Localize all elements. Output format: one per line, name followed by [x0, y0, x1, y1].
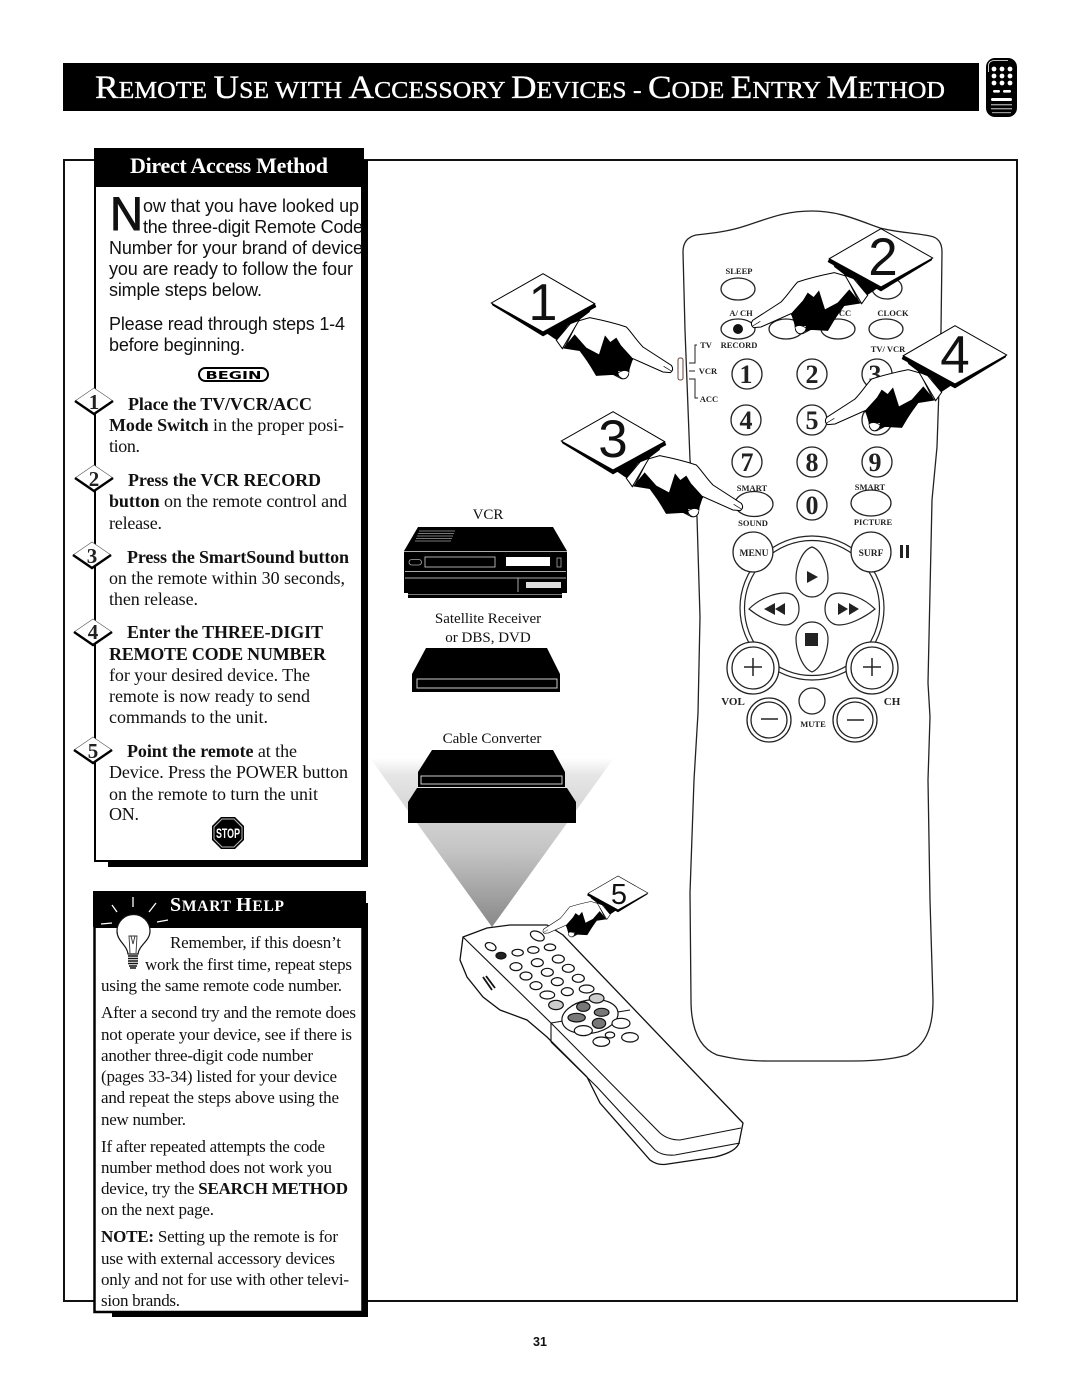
volume and channel buttons: CH	[884, 696, 901, 708]
intro text: Please read through steps 1-4	[109, 314, 345, 334]
help text: If after repeated attempts the code	[101, 1137, 325, 1156]
mode switch	[678, 340, 718, 404]
number keypad: 1	[740, 360, 752, 389]
step card 2 with pointing hand: 2	[868, 228, 898, 287]
step card 1 with pointing hand: 1	[529, 274, 557, 332]
step 2: release.	[109, 513, 162, 533]
number keypad: 2	[806, 360, 818, 389]
number keypad	[731, 359, 892, 520]
step 2	[75, 465, 347, 533]
icon: begin badge: BEGIN	[206, 369, 262, 382]
heading: direct access method: Direct Access Method	[130, 153, 328, 178]
device: satellite receiver: or DBS, DVD	[445, 630, 531, 646]
volume and channel buttons	[721, 642, 901, 742]
help text: only and not for use with other televi-	[101, 1270, 349, 1289]
step 4	[74, 619, 327, 727]
step 5: ON.	[109, 804, 139, 824]
intro text: Number for your brand of device	[109, 238, 363, 258]
step 5: 5	[88, 739, 98, 763]
smart buttons	[735, 482, 892, 528]
number keypad: 7	[740, 448, 754, 477]
step card 2 with pointing hand	[751, 228, 933, 334]
step 1: Mode Switch in the proper posi-	[109, 415, 344, 435]
step 4: Enter the THREE-DIGIT	[127, 622, 323, 642]
help text: another three-digit code number	[101, 1046, 313, 1065]
small remote in hand	[460, 925, 743, 1164]
title bar	[63, 63, 979, 111]
help text: Remember, if this doesn’t	[170, 933, 341, 952]
help text	[101, 933, 356, 1310]
icon: stop sign: STOP	[216, 825, 240, 841]
help text: After a second try and the remote does	[101, 1003, 356, 1022]
device: satellite receiver	[412, 611, 560, 692]
step 3	[73, 542, 349, 609]
heading: smart help: SMART HELP	[170, 894, 285, 916]
step card 4 with pointing hand: 4	[940, 326, 970, 385]
page number: 31	[533, 1335, 547, 1349]
step 1: 1	[89, 390, 99, 414]
volume and channel buttons: MUTE	[800, 719, 826, 729]
step 1	[75, 388, 344, 456]
mode switch: VCR	[699, 366, 718, 376]
label: vcr: VCR	[473, 507, 503, 523]
label: cable converter: Cable Converter	[443, 731, 541, 747]
help text: on the next page.	[101, 1200, 214, 1219]
step 2: 2	[89, 467, 99, 491]
help text: use with external accessory devices	[101, 1249, 335, 1268]
number keypad: 3	[868, 360, 882, 389]
mode switch: TV	[700, 340, 713, 350]
top function buttons: A/ CH	[729, 308, 753, 318]
step 4: 4	[88, 620, 99, 644]
step 4: REMOTE CODE NUMBER	[109, 644, 327, 664]
icon: stop sign	[212, 817, 244, 849]
step 3: 3	[87, 544, 97, 568]
help text: not operate your device, see if there is	[101, 1025, 352, 1044]
title bar: REMOTE USE WITH ACCESSORY DEVICES - CODE ENTRY METHOD	[95, 70, 945, 106]
top function buttons: CLOCK	[877, 308, 909, 318]
navigation ring: SURF	[859, 549, 884, 559]
step card 1 with pointing hand	[491, 274, 673, 379]
help text: new number.	[101, 1110, 186, 1129]
volume and channel buttons: VOL	[721, 696, 745, 708]
step 3: then release.	[109, 589, 198, 609]
signal beam	[370, 758, 614, 927]
top function buttons: SLEEP	[726, 266, 752, 276]
step 5	[74, 737, 348, 824]
smart buttons: PICTURE	[854, 517, 892, 527]
main frame	[64, 160, 1017, 1301]
help text: (pages 33-34) listed for your device	[101, 1067, 337, 1086]
top function buttons	[721, 266, 909, 354]
intro text: the three-digit Remote Code	[143, 217, 363, 237]
label: satellite receiver: Satellite Receiver	[435, 611, 541, 627]
step card 3 with pointing hand	[561, 410, 743, 517]
smart buttons: SMART	[855, 482, 886, 492]
smart buttons: SOUND	[738, 518, 768, 528]
smart buttons: SMART	[737, 483, 768, 493]
large remote control	[678, 211, 942, 1061]
top function buttons: CC	[839, 308, 851, 318]
help text: NOTE: Setting up the remote is for	[101, 1227, 338, 1246]
icon: begin badge	[199, 368, 268, 382]
step 3: on the remote within 30 seconds,	[109, 568, 345, 588]
icon: light bulb	[101, 897, 168, 968]
step 2: Press the VCR RECORD	[128, 470, 321, 490]
step 1: Place the TV/VCR/ACC	[128, 394, 312, 414]
step card 5 with pointing hand	[543, 876, 648, 937]
number keypad: 4	[740, 406, 752, 435]
intro text: you are ready to follow the four	[109, 259, 353, 279]
step 1: tion.	[109, 436, 140, 456]
help text: sion brands.	[101, 1291, 180, 1310]
intro text: ow that you have looked up	[143, 196, 359, 216]
number keypad: 5	[806, 406, 818, 435]
step 5: Point the remote at the	[127, 741, 297, 761]
panel: smart help	[93, 891, 368, 1317]
intro text	[109, 187, 363, 355]
navigation ring: MENU	[739, 549, 769, 559]
step 4: remote is now ready to send	[109, 686, 310, 706]
top function buttons: TV/ VCR	[871, 344, 906, 354]
step card 3 with pointing hand: 3	[598, 410, 628, 469]
help text: work the first time, repeat steps	[145, 955, 352, 974]
step 5: Device. Press the POWER button	[109, 762, 348, 782]
help text: number method does not work you	[101, 1158, 332, 1177]
device: vcr	[404, 507, 567, 598]
step 4: commands to the unit.	[109, 707, 268, 727]
device: cable converter	[408, 731, 576, 823]
number keypad: 8	[806, 448, 818, 477]
number keypad: 9	[868, 448, 882, 477]
mode switch: ACC	[700, 394, 718, 404]
top function buttons: RECORD	[721, 340, 757, 350]
panel: direct access method	[73, 148, 368, 867]
icon: remote control	[986, 58, 1017, 117]
intro text: simple steps below.	[109, 280, 262, 300]
step card 5 with pointing hand: 5	[611, 879, 627, 911]
step 3: Press the SmartSound button	[127, 547, 349, 567]
help text: device, try the SEARCH METHOD	[101, 1179, 348, 1198]
navigation ring	[733, 532, 909, 680]
intro text: before beginning.	[109, 335, 245, 355]
step card 4 with pointing hand	[825, 326, 1007, 431]
number keypad: 0	[806, 491, 818, 520]
step 5: on the remote to turn the unit	[109, 784, 318, 804]
help text: using the same remote code number.	[101, 976, 342, 995]
step 2: button on the remote control and	[109, 491, 347, 511]
intro text: N	[110, 187, 143, 240]
help text: and repeat the steps above using the	[101, 1088, 339, 1107]
step 4: for your desired device. The	[109, 665, 310, 685]
